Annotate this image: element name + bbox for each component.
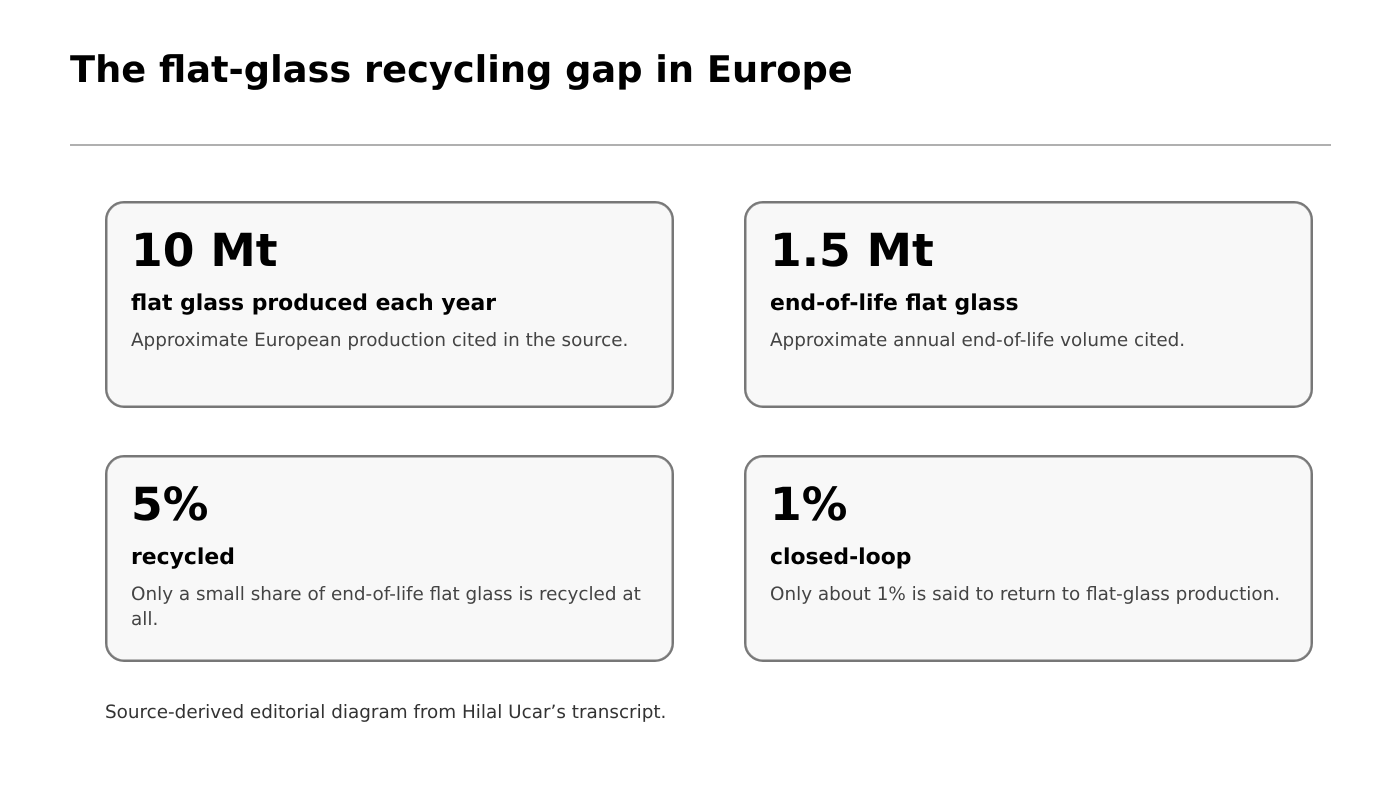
label: end-of-life flat glass: end-of-life flat glass	[770, 291, 1019, 316]
stat: 10 Mt: 10 Mt	[131, 224, 278, 277]
label: recycled: recycled	[131, 545, 235, 570]
stat: 1%: 1%	[770, 478, 847, 531]
label: flat glass produced: flat glass produced each year	[131, 291, 496, 316]
footnote: Source-derived editorial diagram from Hilal Ucar’s transcript.	[105, 702, 666, 723]
description: end-of-life volume: Approximate annual end-of-life volume cited.	[770, 330, 1185, 351]
panel: 5% recycled	[105, 455, 674, 662]
description: recycled share: Only a small share of end-of-life flat glass is recycled at all.	[131, 584, 641, 630]
stat: 1.5 Mt: 1.5 Mt	[770, 224, 934, 277]
label: closed-loop: closed-loop	[770, 545, 911, 570]
panel: 10 Mt produced	[105, 201, 674, 408]
stat: 5%: 5%	[131, 478, 208, 531]
title: The flat-glass recycling gap in Europe	[70, 48, 853, 91]
panel: 1% closed-loop	[744, 455, 1313, 662]
description: production: Approximate European production cited in the source.	[131, 330, 628, 351]
panel: 1.5 Mt end-of-life	[744, 201, 1313, 408]
description: closed-loop share: Only about 1% is said to return to flat-glass production.	[770, 584, 1280, 605]
